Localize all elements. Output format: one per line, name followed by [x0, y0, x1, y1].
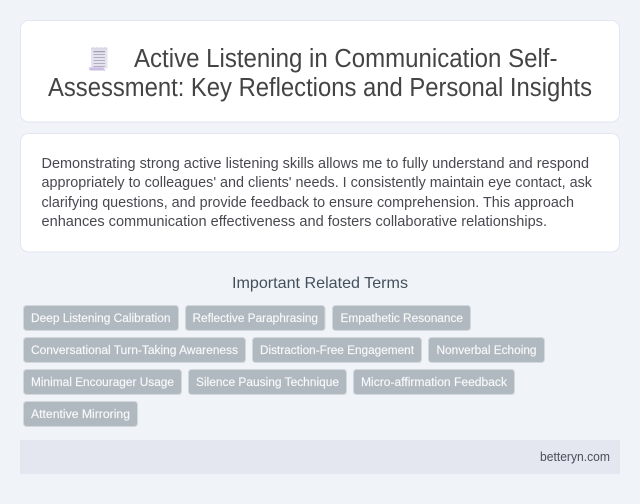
heading: important related terms: Important Related Terms — [232, 275, 408, 292]
tag: Deep Listening Calibration: Deep Listening Calibration — [31, 311, 170, 325]
tag: Nonverbal Echoing — [428, 338, 544, 362]
tag: Attentive Mirroring: Attentive Mirroring — [31, 407, 130, 421]
tag: Reflective Paraphrasing — [186, 306, 325, 330]
title text — [48, 45, 592, 102]
tag list — [24, 306, 544, 426]
paragraph text — [42, 156, 593, 230]
paragraph text: Demonstrating strong active listening skills allows me to fully understand and respond — [42, 156, 589, 172]
tag: Attentive Mirroring — [24, 402, 138, 426]
tag: Conversational Turn-Taking Awareness — [24, 338, 246, 362]
tag: Reflective Paraphrasing: Reflective Paraphrasing — [192, 311, 318, 325]
panel: self-assessment paragraph — [20, 134, 620, 252]
tag: Empathetic Resonance — [332, 306, 470, 330]
tag: Minimal Encourager Usage — [24, 370, 182, 394]
paragraph text: appropriately to colleagues' and clients' needs. I consistently maintain eye contact, ask — [42, 175, 593, 191]
tag: Silence Pausing Technique: Silence Pausing Technique — [196, 375, 339, 389]
tag: Micro-affirmation Feedback: Micro-affirmation Feedback — [361, 375, 508, 389]
paragraph text: enhances communication effectiveness and fosters collaborative relationships. — [42, 214, 547, 230]
tag: Empathetic Resonance: Empathetic Resonance — [340, 311, 463, 325]
tag: Distraction-Free Engagement: Distraction-Free Engagement — [260, 343, 415, 357]
tag: Nonverbal Echoing: Nonverbal Echoing — [436, 343, 536, 357]
paragraph text: clarifying questions, and provide feedback to ensure comprehension. This approach — [42, 195, 574, 211]
footer bar — [20, 440, 620, 474]
tag: Silence Pausing Technique — [188, 370, 346, 394]
title text: Assessment: Key Reflections and Personal Insights — [48, 74, 592, 102]
tag: Micro-affirmation Feedback — [354, 370, 514, 394]
icon: document scroll — [89, 47, 108, 70]
tag: Minimal Encourager Usage: Minimal Encourager Usage — [31, 375, 174, 389]
tag: Deep Listening Calibration — [24, 306, 178, 330]
title text: Active Listening in Communication Self- — [134, 45, 558, 73]
tag: Conversational Turn-Taking Awareness: Conversational Turn-Taking Awareness — [31, 343, 238, 357]
tag: Distraction-Free Engagement — [252, 338, 422, 362]
panel: title card — [20, 20, 620, 122]
footer source text: betteryn.com — [540, 450, 610, 464]
